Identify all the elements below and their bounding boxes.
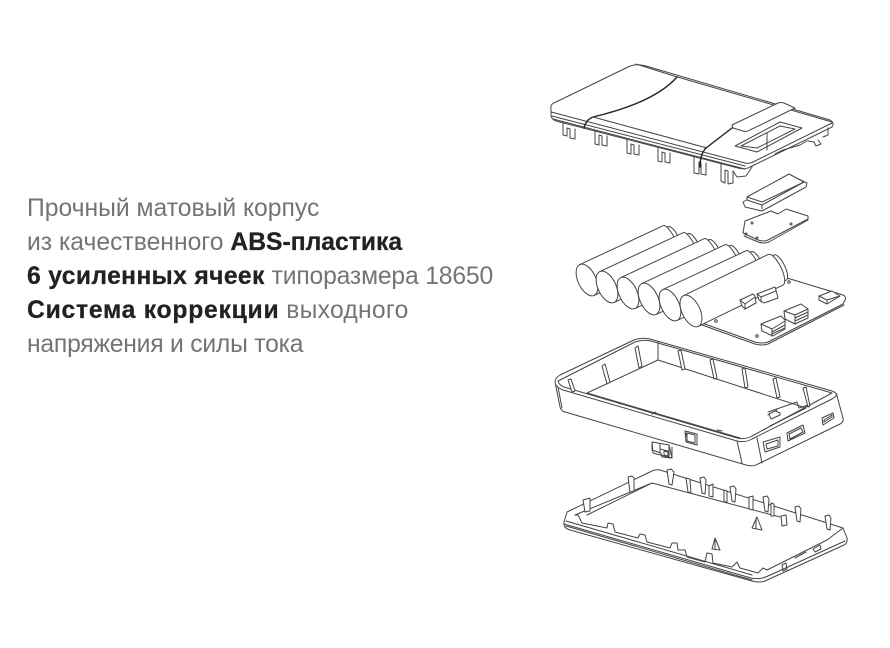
feature line: ABS plastic: из качественного ABS-пластика <box>27 229 402 256</box>
six 18650 battery cells <box>572 222 792 330</box>
middle case frame <box>555 338 843 466</box>
battery 6 <box>675 250 792 330</box>
feature line: correction system: Система коррекции выходного <box>27 297 409 324</box>
feature line: voltage and current: напряжения и силы тока <box>27 331 303 358</box>
main circuit board <box>702 278 846 345</box>
power button <box>652 442 672 458</box>
board connectors <box>740 287 840 336</box>
battery 5 <box>655 247 769 324</box>
top cover <box>551 64 833 184</box>
battery 4 <box>634 241 748 318</box>
battery 3 <box>613 235 727 312</box>
bottom case frame <box>564 469 847 582</box>
small circuit board <box>743 209 808 243</box>
battery 1 <box>572 222 686 299</box>
battery 2 <box>592 229 706 306</box>
small switch block <box>743 174 807 211</box>
text block: product features <box>27 195 493 358</box>
feature line: matte case: Прочный матовый корпус <box>27 195 319 222</box>
feature line: reinforced cells: 6 усиленных ячеек типоразмера 18650 <box>27 263 493 290</box>
